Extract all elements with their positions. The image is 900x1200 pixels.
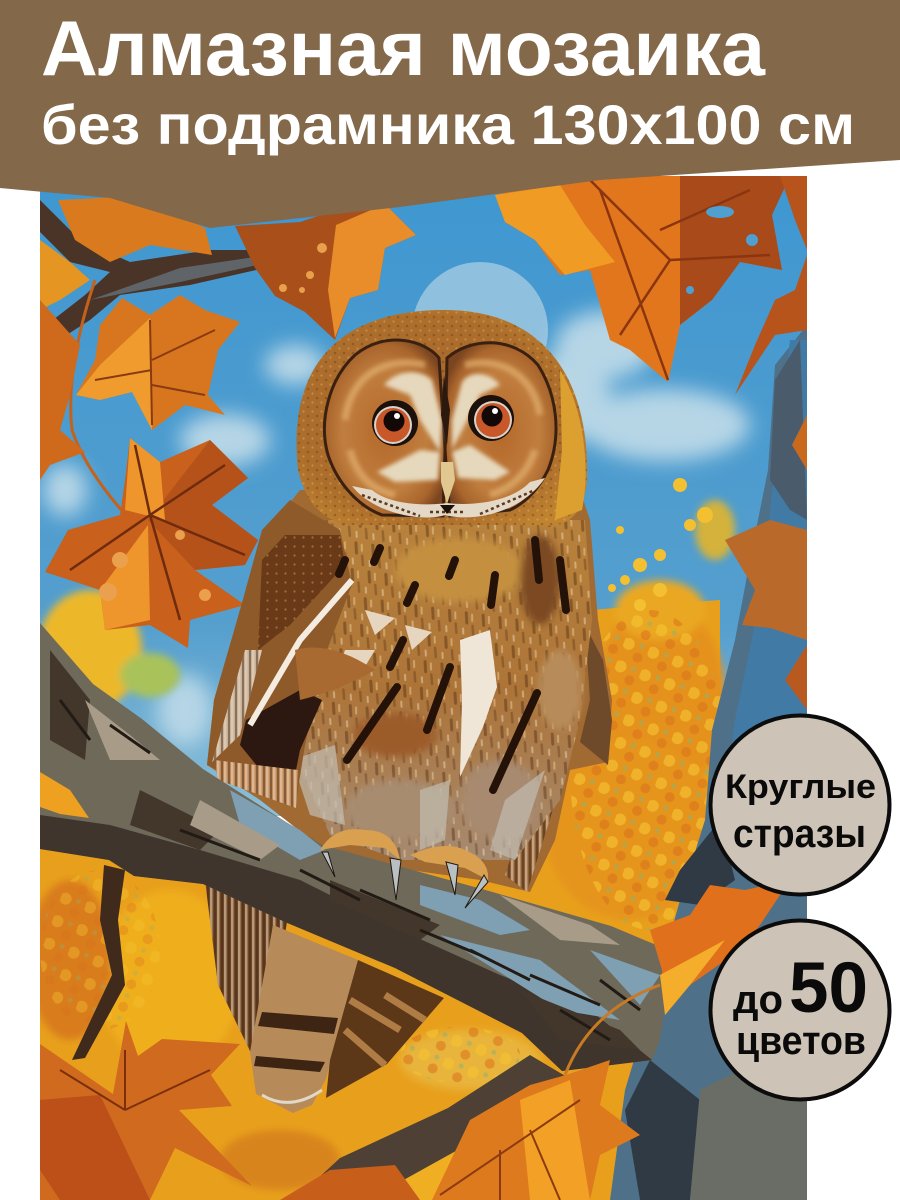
owl feet and talons [320, 829, 488, 908]
right eye [468, 395, 514, 441]
tail feathers [205, 880, 444, 1113]
leaf: right of trunk [725, 520, 807, 710]
lower branches [72, 865, 660, 1195]
badge: up to 50 colours: цветов [736, 1019, 866, 1063]
inner disc rings [345, 363, 540, 495]
ruff below face [352, 478, 545, 518]
leaf: bottom centre [432, 1060, 640, 1200]
leaf: far right [735, 176, 807, 470]
main branch [40, 623, 673, 1071]
right facial disc [445, 343, 556, 516]
badge: up to 50 colours: до [733, 978, 783, 1022]
painting: tawny owl on autumn branch [28, 176, 807, 1200]
badge: round rhinestones: стразы [733, 812, 866, 856]
sky [40, 176, 807, 816]
left eye [372, 400, 418, 446]
badge: up to 50 colours [710, 920, 890, 1100]
dark feather streaks [339, 540, 566, 790]
subtitle: без подрамника 130х100 см [41, 93, 855, 156]
chest [300, 520, 592, 860]
leaf: top right large [495, 176, 790, 382]
leaf: upper left [76, 295, 240, 430]
leaf: bottom left [40, 1021, 252, 1200]
leaf: top left [40, 196, 212, 310]
badge: up to 50 colours: 50 [789, 949, 868, 1028]
owl head [296, 310, 587, 526]
brown header banner [0, 0, 900, 228]
left wing [207, 500, 375, 808]
soft chest shading [345, 535, 582, 840]
moon and clouds [43, 262, 750, 746]
white chest feather [460, 630, 497, 777]
leaf: bottom middle [280, 1165, 420, 1200]
right wing [580, 625, 612, 765]
leaf: top centre [235, 204, 416, 340]
pale eyebrow and cheek patches [377, 372, 510, 482]
title: Алмазная мозаика [41, 4, 766, 92]
left facial disc [324, 340, 445, 516]
centre line of face [441, 375, 450, 445]
beak [441, 462, 455, 504]
tree trunk on the right [610, 325, 807, 1200]
branch split gap [40, 772, 89, 818]
owl body [207, 490, 612, 892]
grey-white lower feathers [292, 745, 545, 860]
badge: round rhinestones: Круглые [725, 768, 876, 806]
leaf: left edge [40, 300, 85, 480]
leaf: right of branch [650, 885, 780, 1015]
leaf: large left [45, 438, 258, 648]
background autumn foliage [28, 478, 807, 1200]
badge: round rhinestones [710, 716, 890, 894]
upper branches [40, 200, 265, 520]
